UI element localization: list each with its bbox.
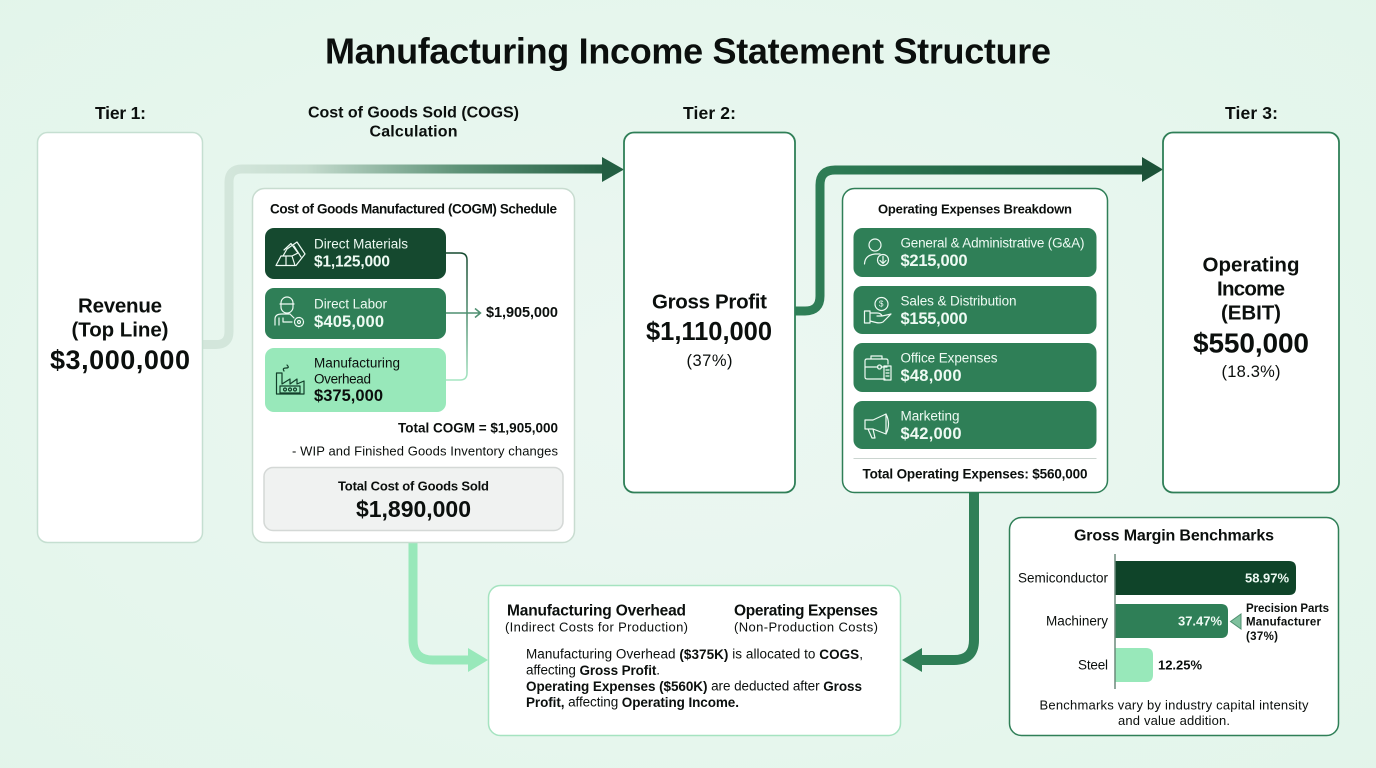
total COGM line: Total COGM = $1,905,000 — [398, 420, 558, 436]
bar: semiconductor — [1018, 561, 1296, 595]
row: sales and distribution: $ — [879, 300, 884, 308]
row: direct materials — [265, 228, 446, 279]
icon: briefcase and receipt — [865, 356, 891, 380]
subtotal value: $1,905,000 — [486, 305, 558, 321]
row: direct materials: Direct Materials — [314, 236, 408, 252]
heading: COGS calculation — [308, 104, 519, 140]
row: sales and distribution: $155,000 — [900, 310, 968, 328]
panel: operating income — [1163, 132, 1339, 492]
bar: machinery: Machinery — [1046, 614, 1108, 628]
panel: revenue: $3,000,000 — [50, 345, 190, 375]
row: direct labor: $405,000 — [314, 313, 384, 331]
benchmarks footnote: and value addition. — [1118, 713, 1230, 728]
callout: precision parts manufacturer: Manufacturer — [1246, 616, 1322, 628]
row: manufacturing overhead — [265, 348, 446, 412]
row: G&A: General & Administrative (G&A) — [900, 236, 1084, 250]
column heading: manufacturing overhead — [505, 602, 688, 634]
row: manufacturing overhead: Manufacturing — [314, 356, 400, 370]
heading: COGS calculation: Cost of Goods Sold (COGS) — [308, 104, 519, 122]
icon: worker with gear — [275, 297, 304, 326]
callout: precision parts manufacturer: Precision Parts — [1246, 603, 1329, 615]
row: direct labor: Direct Labor — [314, 296, 388, 312]
bar: machinery: 37.47% — [1178, 614, 1222, 628]
total COGS box: $1,890,000 — [356, 496, 471, 522]
heading: COGS calculation: Calculation — [370, 124, 458, 140]
COGM heading: Cost of Goods Manufactured (COGM) Schedule — [270, 202, 557, 216]
row: sales and distribution — [854, 286, 1096, 334]
bar chart — [1018, 554, 1296, 689]
row: G&A: $215,000 — [900, 252, 968, 270]
panel: revenue: Revenue — [78, 294, 162, 318]
row: direct materials: $1,125,000 — [314, 254, 390, 270]
connector: cost lines to subtotal — [446, 253, 480, 380]
row: marketing: $42,000 — [900, 425, 962, 443]
callout: precision parts manufacturer — [1230, 603, 1329, 643]
panel: operating income: Income — [1217, 278, 1285, 300]
bar: steel — [1078, 648, 1202, 682]
panel: gross profit — [624, 132, 795, 492]
bar: steel: 12.25% — [1158, 658, 1202, 672]
arrow: COGS panel to note — [413, 542, 488, 672]
panel: operating expenses — [842, 188, 1108, 492]
heading: tier 1: Tier 1: — [95, 103, 146, 123]
total COGS box: Total Cost of Goods Sold — [338, 478, 489, 494]
bar: semiconductor: Semiconductor — [1018, 570, 1108, 586]
title: Manufacturing Income Statement Structure — [325, 30, 1051, 72]
arrow: operating expenses to note — [902, 493, 974, 672]
panel: COGM schedule — [252, 188, 574, 542]
row: manufacturing overhead: Overhead — [314, 372, 371, 386]
row: G&A — [854, 228, 1096, 277]
column heading: operating expenses — [734, 602, 878, 634]
note body text: Operating Expenses ($560K) are deducted after Gross — [526, 678, 862, 694]
row: office expenses — [854, 343, 1096, 392]
benchmarks footnote: Benchmarks vary by industry capital intensity — [1040, 698, 1309, 712]
benchmarks heading: Gross Margin Benchmarks — [1074, 528, 1274, 544]
row: sales and distribution: Sales & Distribution — [900, 294, 1016, 308]
note body text: affecting Gross Profit. — [526, 662, 660, 678]
icon: factory — [276, 365, 304, 394]
row: manufacturing overhead: $375,000 — [314, 387, 383, 405]
callout: precision parts manufacturer: (37%) — [1246, 631, 1278, 643]
column heading: manufacturing overhead: Manufacturing Overhead — [507, 602, 686, 620]
row: marketing — [854, 401, 1096, 449]
icon: person with plus — [864, 239, 888, 266]
row: marketing: Marketing — [900, 408, 960, 424]
icon: material bars — [276, 242, 305, 266]
panel: gross profit: $1,110,000 — [646, 318, 772, 346]
benchmarks footnote — [1040, 698, 1309, 728]
icon: megaphone — [865, 414, 888, 438]
panel: gross profit: Gross Profit — [652, 290, 767, 314]
row: direct labor — [265, 288, 446, 339]
total operating expenses: Total Operating Expenses: $560,000 — [862, 466, 1088, 482]
row: office expenses: Office Expenses — [900, 350, 998, 366]
bar: semiconductor: 58.97% — [1245, 570, 1289, 586]
heading: tier 3: Tier 3: — [1225, 103, 1278, 123]
column heading: operating expenses: Operating Expenses — [734, 602, 878, 620]
note body text: Profit, affecting Operating Income. — [526, 694, 739, 710]
panel: gross margin benchmarks — [1010, 518, 1338, 736]
opex heading: Operating Expenses Breakdown — [878, 202, 1072, 216]
panel: operating income: $550,000 — [1193, 328, 1309, 358]
inventory adjustment line: - WIP and Finished Goods Inventory changes — [292, 444, 558, 458]
arrow: revenue to gross profit — [203, 157, 624, 344]
panel: revenue — [38, 132, 202, 542]
column heading: manufacturing overhead: (Indirect Costs for Production) — [505, 620, 688, 634]
note body text — [526, 646, 863, 710]
panel: gross profit: (37%) — [686, 352, 732, 370]
icon: hand with coin — [864, 298, 891, 323]
note body text: Manufacturing Overhead ($375K) is allocated to COGS, — [526, 646, 863, 662]
arrow: gross profit to operating income — [795, 157, 1163, 311]
heading: tier 2: Tier 2: — [683, 103, 736, 123]
panel: operating income: Operating — [1202, 254, 1300, 276]
row: office expenses: $48,000 — [900, 367, 962, 385]
bar: machinery — [1046, 604, 1228, 638]
panel: operating income: (EBIT) — [1221, 302, 1281, 324]
panel: operating income: (18.3%) — [1222, 363, 1280, 381]
panel: overhead vs operating expenses note — [488, 586, 900, 736]
bar: steel: Steel — [1078, 658, 1108, 672]
total COGS box — [264, 468, 563, 530]
panel: revenue: (Top Line) — [72, 318, 168, 342]
column heading: operating expenses: (Non-Production Costs) — [734, 620, 878, 634]
